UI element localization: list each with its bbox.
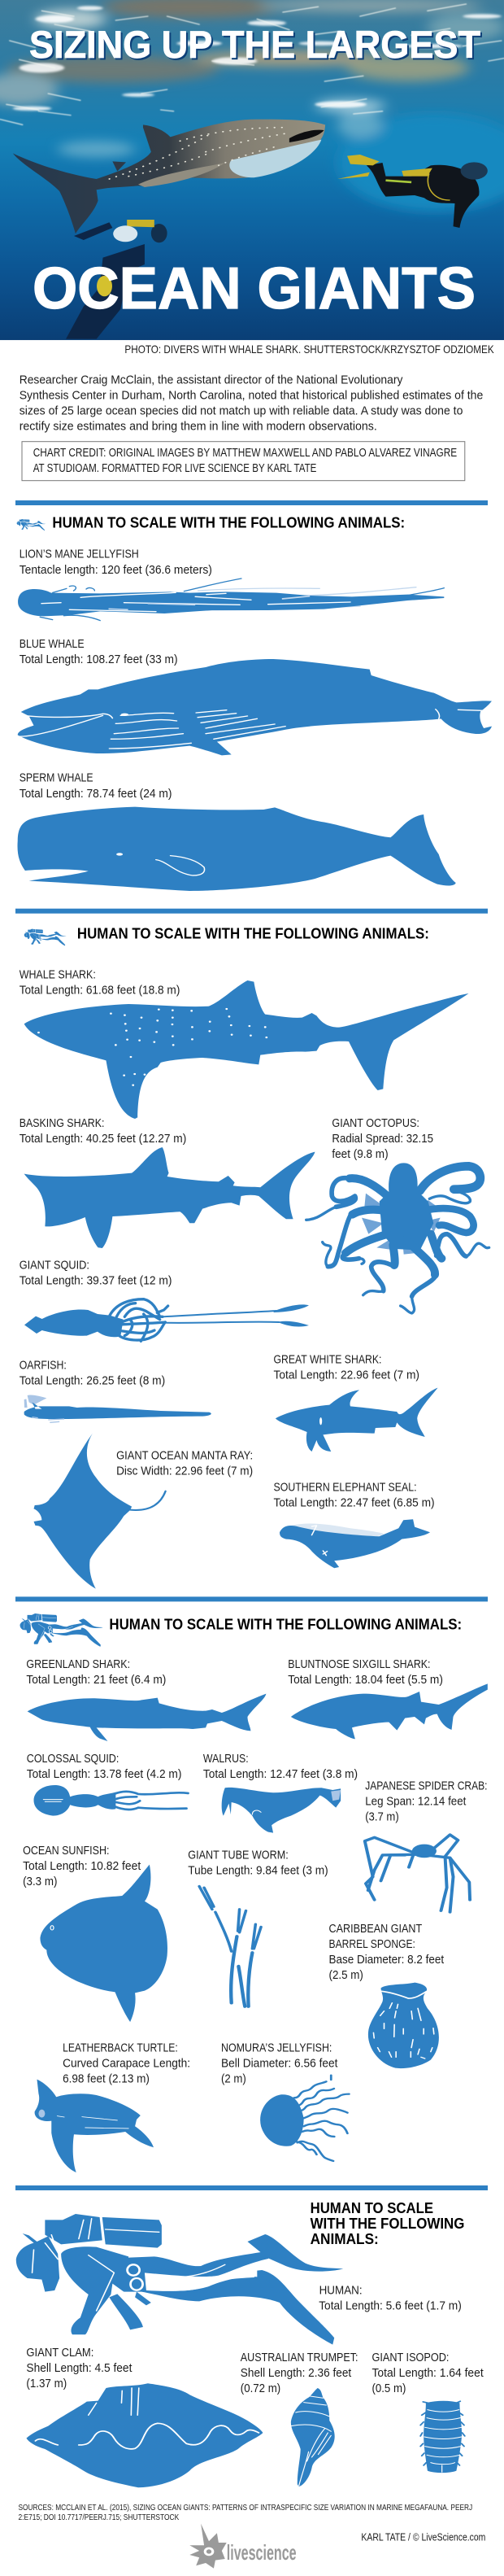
livescience logo: livescience: [227, 2540, 297, 2565]
human label: [319, 2283, 462, 2312]
blue whale label: Total Length: 108.27 feet (33 m): [20, 653, 178, 666]
colossal squid label: [27, 1752, 181, 1781]
japanese spider crab label: (3.7 m): [365, 1810, 399, 1824]
sperm whale label: [20, 771, 172, 801]
lion's mane jellyfish silhouette: [18, 579, 444, 621]
giant octopus label: GIANT OCTOPUS:: [332, 1116, 419, 1130]
giant tube worm label: Tube Length: 9.84 feet (3 m): [188, 1863, 328, 1877]
chart credit box: [22, 442, 465, 481]
leatherback turtle label: Curved Carapace Length:: [63, 2056, 190, 2070]
nomura's jellyfish label: (2 m): [221, 2072, 246, 2085]
colossal squid silhouette: [34, 1785, 188, 1816]
intro text: Synthesis Center in Durham, North Carolina, noted that historical published estimates of the: [20, 389, 483, 403]
greenland shark label: Total Length: 21 feet (6.4 m): [26, 1673, 166, 1687]
walrus label: WALRUS:: [203, 1752, 249, 1766]
australian trumpet label: (0.72 m): [241, 2382, 280, 2395]
nomura's jellyfish silhouette: [260, 2076, 349, 2161]
section 3 heading: [20, 1613, 462, 1647]
walrus silhouette: [222, 1788, 341, 1833]
lion's mane jellyfish label: LION’S MANE JELLYFISH: [20, 548, 139, 561]
diver left: [66, 220, 167, 339]
basking shark label: Total Length: 40.25 feet (12.27 m): [20, 1132, 186, 1146]
leatherback turtle label: LEATHERBACK TURTLE:: [63, 2041, 178, 2054]
section 2 heading: [24, 924, 429, 945]
giant squid label: Total Length: 39.37 feet (12 m): [20, 1273, 172, 1287]
intro text: [20, 373, 483, 434]
human label: HUMAN:: [319, 2283, 363, 2297]
giant clam label: (1.37 m): [26, 2377, 67, 2390]
giant tube worm label: GIANT TUBE WORM:: [188, 1848, 289, 1862]
giant clam silhouette: [26, 2383, 263, 2487]
giant ocean manta ray label: [116, 1448, 253, 1478]
title: ocean giants: OCEAN GIANTS: [33, 256, 476, 321]
bluntnose sixgill shark label: [288, 1657, 443, 1687]
leatherback turtle label: [63, 2041, 190, 2085]
oarfish label: Total Length: 26.25 feet (8 m): [20, 1374, 165, 1388]
hero photo: divers with whale shark: [0, 0, 504, 340]
leatherback turtle silhouette: [35, 2080, 154, 2172]
giant octopus label: [332, 1116, 433, 1161]
japanese spider crab label: [365, 1779, 488, 1824]
giant tube worm label: [188, 1848, 328, 1877]
japanese spider crab silhouette: [365, 1835, 470, 1912]
great white shark label: GREAT WHITE SHARK:: [273, 1353, 381, 1367]
bluntnose sixgill shark label: BLUNTNOSE SIXGILL SHARK:: [288, 1657, 431, 1671]
basking shark label: [20, 1116, 186, 1146]
intro text: Researcher Craig McClain, the assistant director of the National Evolutionary: [20, 373, 403, 387]
walrus label: [203, 1752, 358, 1781]
whale shark label: WHALE SHARK:: [20, 967, 96, 981]
giant isopod label: GIANT ISOPOD:: [372, 2351, 449, 2364]
giant ocean manta ray label: Disc Width: 22.96 feet (7 m): [116, 1464, 253, 1478]
leatherback turtle label: 6.98 feet (2.13 m): [63, 2072, 150, 2085]
australian trumpet label: Shell Length: 2.36 feet: [241, 2366, 352, 2380]
giant clam label: [26, 2346, 133, 2390]
giant squid label: GIANT SQUID:: [20, 1258, 89, 1272]
intro text: sizes of 25 large ocean species did not match up with reliable data. A study was done to: [20, 404, 463, 418]
southern elephant seal label: [273, 1481, 435, 1510]
whale shark silhouette: [24, 980, 468, 1119]
basking shark silhouette: [24, 1147, 315, 1248]
australian trumpet label: [241, 2351, 358, 2395]
ocean sunfish label: Total Length: 10.82 feet: [23, 1859, 141, 1873]
livescience logo: [189, 2524, 297, 2569]
giant octopus label: Radial Spread: 32.15: [332, 1132, 433, 1146]
colossal squid label: COLOSSAL SQUID:: [27, 1752, 119, 1766]
bluntnose sixgill shark label: Total Length: 18.04 feet (5.5 m): [288, 1673, 443, 1687]
human label: Total Length: 5.6 feet (1.7 m): [319, 2299, 462, 2312]
bluntnose sixgill shark silhouette: [291, 1683, 488, 1739]
oarfish label: [20, 1358, 165, 1388]
diver right: [337, 155, 488, 228]
section 4 heading: WITH THE FOLLOWING: [311, 2215, 464, 2232]
section 3 heading: HUMAN TO SCALE WITH THE FOLLOWING ANIMALS:: [109, 1616, 462, 1633]
barrel sponge silhouette: [368, 1983, 439, 2068]
basking shark label: BASKING SHARK:: [20, 1116, 105, 1130]
ocean sunfish label: [23, 1844, 141, 1888]
southern elephant seal label: SOUTHERN ELEPHANT SEAL:: [273, 1481, 416, 1495]
section 4 heading: HUMAN TO SCALE: [311, 2199, 433, 2216]
nomura's jellyfish label: NOMURA’S JELLYFISH:: [221, 2041, 332, 2054]
caribbean giant barrel sponge label: [328, 1922, 445, 1982]
giant octopus label: feet (9.8 m): [332, 1147, 389, 1161]
whale shark: [13, 120, 325, 234]
blue whale label: BLUE WHALE: [20, 637, 85, 651]
australian trumpet silhouette: [291, 2388, 335, 2486]
giant isopod label: Total Length: 1.64 feet: [372, 2366, 484, 2380]
section 4 heading: [311, 2199, 464, 2247]
blue whale label: [20, 637, 178, 666]
nomura's jellyfish label: [221, 2041, 338, 2085]
big human diver silhouette: [16, 2214, 343, 2345]
chart credit box: AT STUDIOAM. FORMATTED FOR LIVE SCIENCE BY KARL TATE: [33, 461, 316, 475]
whale shark label: Total Length: 61.68 feet (18.8 m): [20, 983, 180, 997]
title: sizing up the largest: SIZING UP THE LARGEST: [29, 23, 480, 66]
sperm whale silhouette: [18, 807, 456, 891]
section 1 heading: HUMAN TO SCALE WITH THE FOLLOWING ANIMALS:: [52, 513, 405, 530]
nomura's jellyfish label: Bell Diameter: 6.56 feet: [221, 2056, 338, 2070]
greenland shark silhouette: [28, 1694, 266, 1741]
lion's mane jellyfish label: Tentacle length: 120 feet (36.6 meters): [20, 563, 212, 577]
giant squid label: [20, 1258, 172, 1287]
colossal squid label: Total Length: 13.78 feet (4.2 m): [27, 1767, 181, 1781]
walrus label: Total Length: 12.47 feet (3.8 m): [203, 1767, 358, 1781]
great white shark label: [273, 1353, 419, 1382]
giant squid silhouette: [24, 1299, 309, 1341]
oarfish silhouette: [24, 1395, 211, 1422]
great white shark label: Total Length: 22.96 feet (7 m): [273, 1369, 419, 1382]
ocean sunfish label: (3.3 m): [23, 1875, 57, 1888]
blue whale silhouette: [18, 659, 492, 755]
whale shark label: [20, 967, 180, 997]
giant clam label: Shell Length: 4.5 feet: [26, 2361, 133, 2375]
greenland shark label: GREENLAND SHARK:: [26, 1657, 130, 1671]
ocean sunfish label: OCEAN SUNFISH:: [23, 1844, 110, 1858]
japanese spider crab label: Leg Span: 12.14 feet: [365, 1795, 467, 1809]
giant ocean manta ray label: GIANT OCEAN MANTA RAY:: [116, 1448, 253, 1462]
great white shark silhouette: [276, 1388, 438, 1452]
sperm whale label: Total Length: 78.74 feet (24 m): [20, 787, 172, 801]
sources: [18, 2503, 472, 2522]
oarfish label: OARFISH:: [20, 1358, 67, 1372]
southern elephant seal label: Total Length: 22.47 feet (6.85 m): [273, 1496, 435, 1510]
caribbean giant barrel sponge label: BARREL SPONGE:: [328, 1937, 415, 1951]
caribbean giant barrel sponge label: Base Diameter: 8.2 feet: [328, 1953, 445, 1967]
manta ray silhouette: [34, 1434, 166, 1589]
australian trumpet label: AUSTRALIAN TRUMPET:: [241, 2351, 358, 2364]
giant clam label: GIANT CLAM:: [26, 2346, 93, 2360]
section 4 heading: ANIMALS:: [311, 2230, 379, 2247]
caribbean giant barrel sponge label: CARIBBEAN GIANT: [328, 1922, 422, 1936]
giant octopus silhouette: [306, 1163, 489, 1313]
giant isopod label: (0.5 m): [372, 2382, 406, 2395]
giant isopod label: [372, 2351, 484, 2395]
greenland shark label: [26, 1657, 166, 1687]
sources: 2:E715; DOI 10.7717/PEERJ.715; SHUTTERSTOCK: [18, 2513, 179, 2522]
section 2 heading: HUMAN TO SCALE WITH THE FOLLOWING ANIMALS:: [77, 924, 429, 941]
sperm whale label: SPERM WHALE: [20, 771, 93, 785]
ocean sunfish silhouette: [40, 1865, 167, 2022]
giant tube worm silhouette: [199, 1886, 261, 2006]
intro text: rectify size estimates and bring them in line with modern observations.: [20, 420, 377, 434]
giant isopod silhouette: [420, 2401, 465, 2473]
southern elephant seal silhouette: [280, 1519, 430, 1568]
lion's mane jellyfish label: [20, 548, 212, 577]
caribbean giant barrel sponge label: (2.5 m): [328, 1968, 363, 1982]
